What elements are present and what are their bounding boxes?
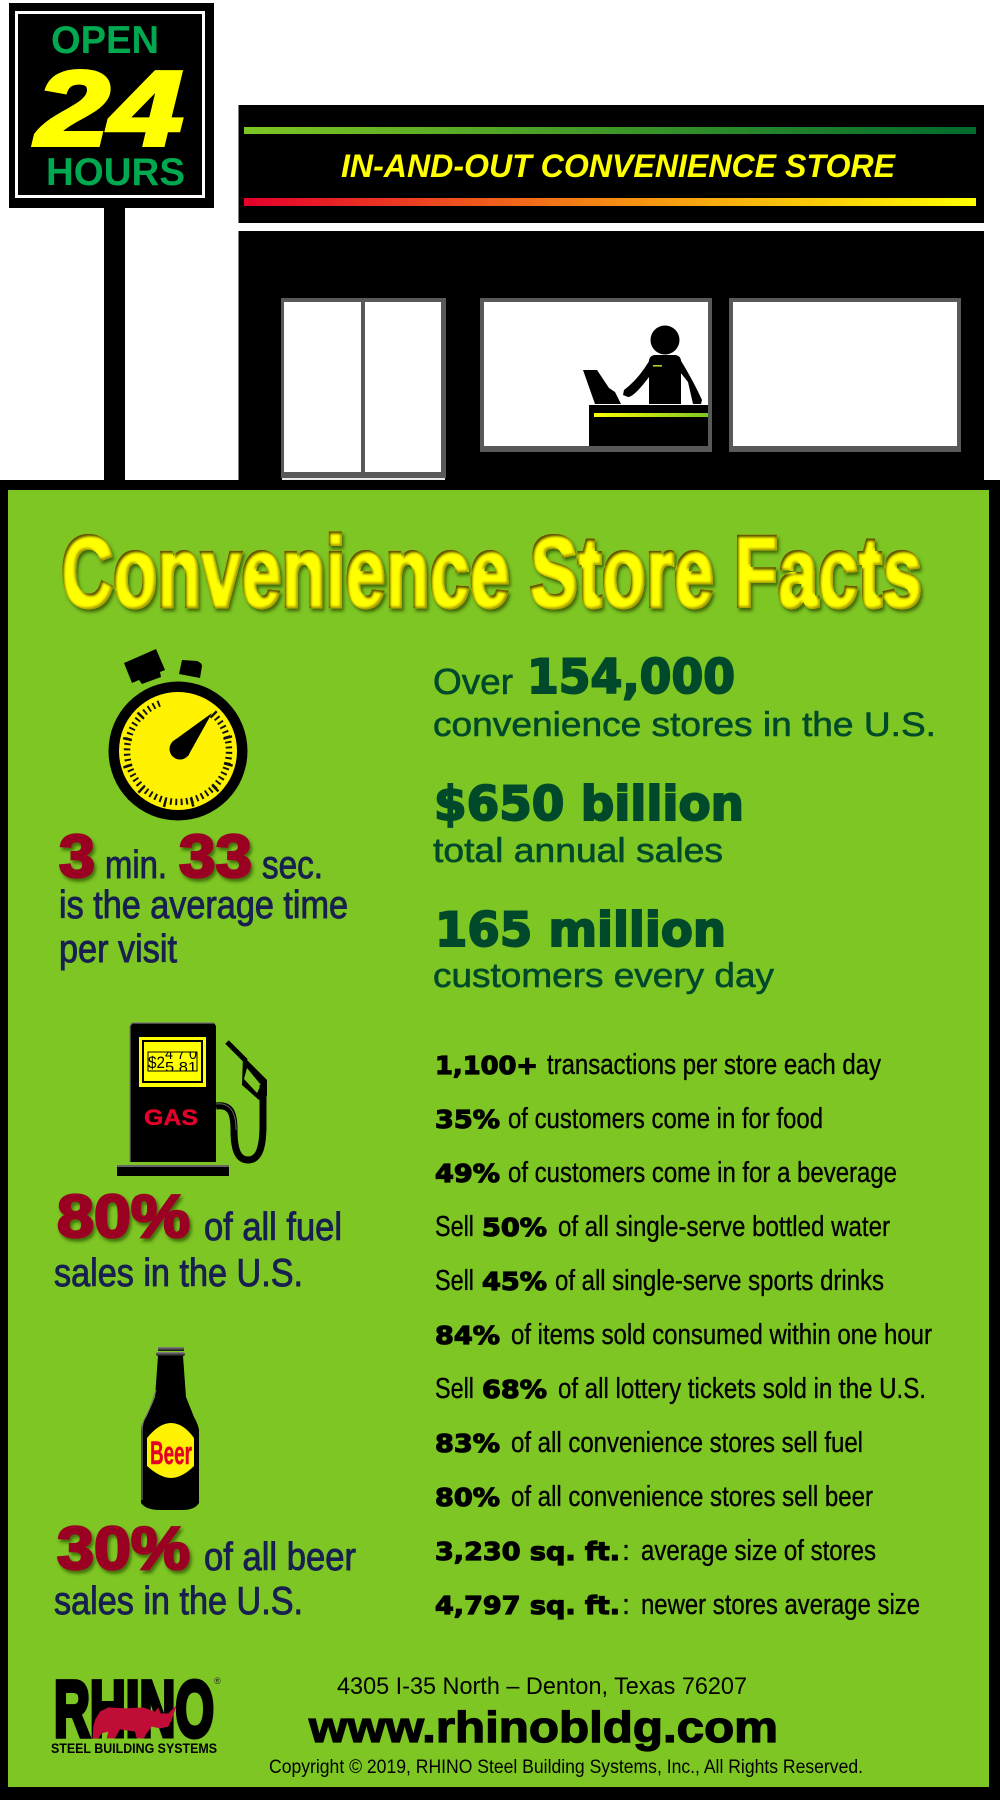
- sales description: total annual sales: [433, 832, 723, 870]
- fact: sell fuel: of all convenience stores sell fuel: [511, 1427, 863, 1459]
- fact: transactions: transactions per store each day: [547, 1049, 881, 1081]
- 154,000: 154,000: [527, 650, 735, 705]
- fact: lottery tickets: [435, 1373, 926, 1405]
- fact: lottery tickets: Sell: [435, 1373, 474, 1405]
- green facts panel: [0, 480, 1000, 1800]
- stat: number of stores: [433, 650, 936, 744]
- hose and nozzle: [216, 1042, 267, 1160]
- store building: [238, 231, 984, 481]
- fuel text line 2: sales in the U.S.: [54, 1252, 303, 1295]
- price display: 5.81: [165, 1059, 197, 1076]
- fuel text line 1: of all fuel: [204, 1206, 342, 1249]
- fact: transactions: 1,100+: [435, 1051, 538, 1080]
- beer text line 2: sales in the U.S.: [54, 1580, 303, 1623]
- fact: bottled water: [435, 1211, 890, 1243]
- sign pole: [104, 208, 125, 480]
- address: 4305 I-35 North – Denton, Texas 76207: [337, 1673, 747, 1700]
- logo tagline: STEEL BUILDING SYSTEMS: [51, 1740, 217, 1756]
- rhino silhouette: [93, 1705, 177, 1738]
- sign text: hours: HOURS: [46, 151, 185, 194]
- fact: sports drinks: 45%: [482, 1267, 547, 1296]
- stat: annual sales: [433, 777, 744, 870]
- price display: $2: [148, 1053, 165, 1072]
- label sec: sec.: [262, 844, 323, 887]
- store sign banner: [238, 105, 984, 223]
- 80 percent: 80%: [57, 1183, 190, 1250]
- fact: food: [435, 1103, 823, 1135]
- icon: stopwatch: [108, 649, 248, 820]
- stat: fuel sales: [54, 1183, 342, 1295]
- 165 million: 165 million: [435, 903, 726, 958]
- $650 billion: $650 billion: [434, 777, 744, 832]
- website: www.rhinobldg.com: [308, 1703, 778, 1752]
- logo: rhino steel building systems: [51, 1664, 221, 1756]
- fact: consumed within one hour: 84%: [435, 1321, 500, 1350]
- fact: newer stores size: :: [622, 1589, 630, 1621]
- stat: average visit time: [59, 823, 348, 971]
- fact: sports drinks: Sell: [435, 1265, 474, 1297]
- sign text: open: OPEN: [51, 19, 159, 62]
- customers description: customers every day: [433, 957, 774, 995]
- facts list: [435, 1049, 932, 1621]
- 30 percent: 30%: [57, 1515, 190, 1582]
- fact: sell beer: 80%: [435, 1483, 500, 1512]
- fact: food: of customers come in for food: [508, 1103, 823, 1135]
- fact: newer stores size: 4,797 sq. ft.: [435, 1591, 620, 1620]
- fact: lottery tickets: of all lottery tickets sold in the U.S.: [558, 1373, 926, 1405]
- over: Over: [433, 661, 513, 702]
- stat: customers: [433, 903, 774, 995]
- fact: newer stores size: newer stores average size: [641, 1589, 920, 1621]
- fact: bottled water: 50%: [482, 1213, 547, 1242]
- label min: min.: [105, 844, 167, 887]
- price display: [139, 1037, 206, 1087]
- fact: beverage: 49%: [435, 1159, 500, 1188]
- fact: bottled water: Sell: [435, 1211, 474, 1243]
- fact: beverage: of customers come in for a beverage: [508, 1157, 897, 1189]
- fact: newer stores size: [435, 1589, 920, 1621]
- number 33: 33: [179, 823, 252, 890]
- copyright: Copyright © 2019, RHINO Steel Building Systems, Inc., All Rights Reserved.: [269, 1756, 863, 1778]
- fact: food: 35%: [435, 1105, 500, 1134]
- stat: beer sales: [54, 1515, 356, 1623]
- beer text line 1: of all beer: [204, 1536, 356, 1579]
- fact: average size: [435, 1535, 876, 1567]
- stores description: convenience stores in the U.S.: [433, 706, 936, 744]
- logo wordmark: RHINO: [54, 1664, 214, 1753]
- icon: beer bottle: [141, 1347, 199, 1510]
- fact: lottery tickets: 68%: [482, 1375, 547, 1404]
- fact: sell beer: of all convenience stores sell beer: [511, 1481, 873, 1513]
- fact: average size: average size of stores: [641, 1535, 876, 1567]
- fact: sell fuel: 83%: [435, 1429, 500, 1458]
- number 3: 3: [59, 823, 95, 890]
- gas label: GAS: [144, 1105, 198, 1130]
- sign: open 24 hours: [9, 3, 214, 480]
- cash register: [583, 370, 621, 404]
- fact: average size: 3,230 sq. ft.: [435, 1537, 620, 1566]
- fact: transactions: [435, 1049, 881, 1081]
- window right: [729, 298, 961, 452]
- beer label: Beer: [150, 1435, 192, 1471]
- counter: [589, 405, 708, 446]
- store name: IN-AND-OUT CONVENIENCE STORE: [341, 148, 897, 184]
- door: [281, 298, 446, 480]
- fact: sports drinks: [435, 1265, 884, 1297]
- window with cashier: [480, 298, 712, 452]
- cashier: [623, 326, 702, 404]
- registered mark: ®: [214, 1676, 221, 1686]
- fact: sports drinks: of all single-serve sports drinks: [555, 1265, 884, 1297]
- fact: average size: :: [622, 1535, 630, 1567]
- sign text: 24: 24: [34, 50, 183, 168]
- description line 1: is the average time: [59, 884, 348, 927]
- fact: bottled water: of all single-serve bottled water: [558, 1211, 890, 1243]
- price display: 4 7 0: [165, 1046, 197, 1063]
- icon: gas pump: [117, 1023, 267, 1176]
- description line 2: per visit: [59, 928, 177, 971]
